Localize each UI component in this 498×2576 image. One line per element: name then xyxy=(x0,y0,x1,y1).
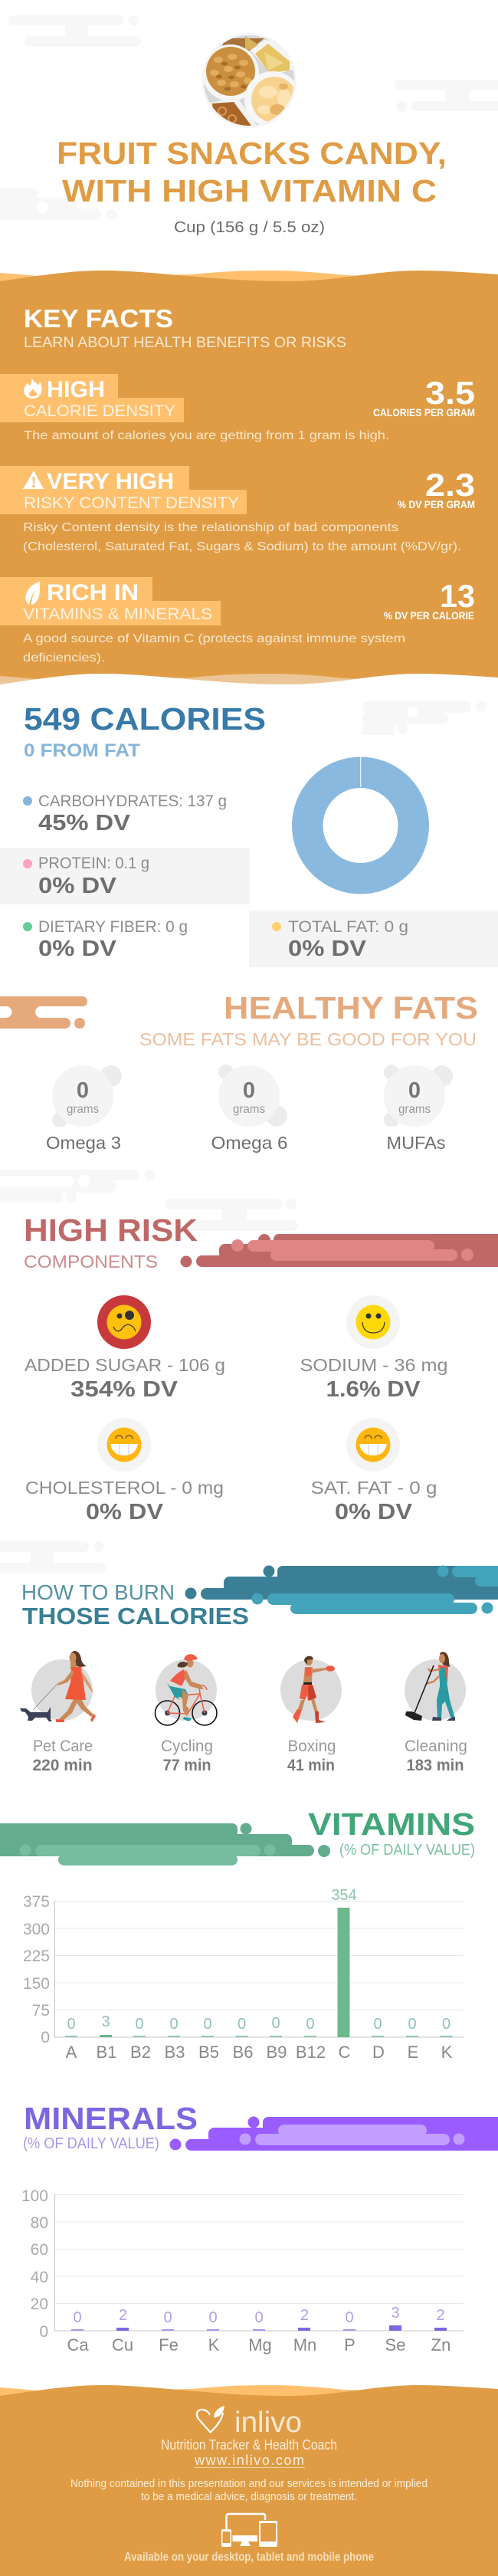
legend: protein: PROTEIN: 0.1 g xyxy=(38,855,149,872)
activity: cleaning: 183 min xyxy=(406,1757,464,1774)
panel: key facts xyxy=(0,271,498,686)
component: cholesterol xyxy=(25,1418,224,1524)
bar chart: vitamins: 75 xyxy=(32,2002,50,2020)
icon: grinning face xyxy=(107,1427,141,1462)
disclaimer: to be a medical advice, diagnosis or treatment. xyxy=(141,2490,357,2503)
stat: omega 3: Omega 3 xyxy=(46,1133,121,1153)
bar chart: vitamins: 0 xyxy=(67,2016,76,2033)
component: added sugar xyxy=(25,1295,225,1402)
subheading: (% OF DAILY VALUE) xyxy=(339,1842,475,1859)
bar chart: minerals: Ca xyxy=(67,2335,89,2354)
label: very high: VERY HIGH xyxy=(47,469,174,494)
bar chart: vitamins: K xyxy=(441,2043,453,2062)
bar chart: minerals: 2 xyxy=(119,2307,127,2324)
panel: footer xyxy=(0,2385,498,2576)
bar chart: minerals: P xyxy=(344,2335,355,2354)
bar chart: minerals: 0 xyxy=(73,2309,82,2326)
stat: omega 3: grams xyxy=(67,1103,99,1116)
stat: omega 6 xyxy=(211,1065,288,1153)
legend: carbohydrates: 45% DV xyxy=(38,811,131,835)
bar chart: minerals: 3 xyxy=(391,2305,400,2322)
bar chart: vitamins: B5 xyxy=(198,2043,219,2062)
component: added sugar: 354% DV xyxy=(70,1377,179,1402)
heading: VITAMINS xyxy=(308,1806,475,1842)
heading line one: HOW TO BURN xyxy=(21,1580,175,1604)
title: FRUIT SNACKS CANDY, xyxy=(57,136,447,171)
stat: omega 3: 0 xyxy=(77,1078,89,1103)
legend: total fat xyxy=(249,911,498,967)
description xyxy=(23,521,461,553)
bar chart: vitamins: E xyxy=(408,2043,418,2062)
bar chart: vitamins: A xyxy=(66,2043,77,2062)
bar chart: minerals: Fe xyxy=(159,2335,179,2354)
activity: cycling: Cycling xyxy=(161,1738,213,1755)
value: 13 xyxy=(440,578,475,614)
bar chart: minerals: Mn xyxy=(293,2335,316,2354)
header blob xyxy=(181,1234,498,1268)
fact: calorie density xyxy=(0,374,475,442)
availability note: Available on your desktop, tablet and mobile phone xyxy=(124,2551,374,2564)
title xyxy=(57,136,447,208)
bar chart: minerals: 2 xyxy=(436,2307,445,2324)
website link: www.inlivo.com xyxy=(194,2453,304,2468)
donut chart xyxy=(307,756,414,878)
component: added sugar: ADDED SUGAR - 106 g xyxy=(25,1355,225,1375)
tagline: Nutrition Tracker & Health Coach xyxy=(161,2437,337,2453)
disclaimer: Nothing contained in this presentation and our services is intended or implied xyxy=(70,2477,428,2490)
unit: % DV PER CALORIE xyxy=(384,609,474,622)
component: sodium: SODIUM - 36 mg xyxy=(300,1355,447,1375)
subheading: COMPONENTS xyxy=(24,1252,158,1272)
legend: carbohydrates: CARBOHYDRATES: 137 g xyxy=(38,792,227,810)
heading line two: THOSE CALORIES xyxy=(22,1603,249,1629)
bar chart: minerals: 80 xyxy=(31,2214,48,2232)
stat: mufas: 0 xyxy=(408,1078,421,1103)
activity: boxing: 41 min xyxy=(287,1757,335,1774)
stat: mufas xyxy=(384,1065,453,1153)
heading: HIGH RISK xyxy=(24,1213,198,1248)
bar chart: vitamins: 0 xyxy=(408,2016,417,2033)
icon: flame xyxy=(24,377,41,399)
description: Risky Content density is the relationship of bad components xyxy=(23,521,398,534)
legend: dietary fiber xyxy=(23,918,188,961)
unit: % DV PER GRAM xyxy=(398,498,475,510)
heading: 549 calories: 549 CALORIES xyxy=(24,701,266,737)
bar chart: minerals: 60 xyxy=(31,2241,48,2259)
component: sodium: 1.6% DV xyxy=(326,1377,421,1402)
value: 3.5 xyxy=(425,375,475,411)
activity: cycling: 77 min xyxy=(162,1757,211,1774)
bar chart: minerals: 0 xyxy=(39,2323,48,2341)
header blob xyxy=(185,1565,498,1614)
heading: MINERALS xyxy=(24,2101,198,2136)
heading: HEALTHY FATS xyxy=(224,990,478,1025)
icon: woman walking dog xyxy=(20,1651,96,1722)
bar chart: vitamins: B9 xyxy=(267,2043,287,2062)
activity: boxing xyxy=(280,1656,342,1774)
stat: omega 6: 0 xyxy=(243,1078,255,1103)
panel: calories xyxy=(0,701,498,967)
activity: cycling xyxy=(155,1654,217,1774)
component: saturated fat: SAT. FAT - 0 g xyxy=(311,1478,437,1498)
bar chart: minerals: 20 xyxy=(31,2295,48,2313)
icon: grinning face xyxy=(355,1427,391,1462)
bar chart: vitamins: 0 xyxy=(203,2016,212,2033)
activity: boxing: Boxing xyxy=(288,1738,336,1755)
label: risky content density: RISKY CONTENT DENSITY xyxy=(24,494,239,512)
label: rich in: RICH IN xyxy=(47,580,139,605)
stat: mufas: grams xyxy=(398,1103,431,1116)
unit: CALORIES PER GRAM xyxy=(373,406,475,418)
description: (Cholesterol, Saturated Fat, Sugars & Sodium) to the amount (%DV/gr). xyxy=(23,540,461,553)
brand name: inlivo xyxy=(234,2407,302,2439)
bar chart: vitamins: 0 xyxy=(442,2016,450,2033)
stat: omega 6: Omega 6 xyxy=(211,1133,288,1153)
bar chart: vitamins: 0 xyxy=(169,2016,179,2033)
description: The amount of calories you are getting from 1 gram is high. xyxy=(24,429,389,442)
bar chart: vitamins: 3 xyxy=(101,2013,110,2030)
icon: smiling face xyxy=(355,1304,391,1340)
component: saturated fat xyxy=(311,1418,437,1524)
bar chart: vitamins: 150 xyxy=(23,1975,50,1993)
activity: pet care xyxy=(20,1651,96,1774)
bar chart: minerals xyxy=(21,2187,464,2354)
component: saturated fat: 0% DV xyxy=(335,1500,413,1524)
bar chart: minerals: Mg xyxy=(248,2335,272,2354)
fact: rich in vitamins and minerals xyxy=(0,577,475,665)
bar chart: vitamins: 300 xyxy=(23,1921,50,1938)
legend: total fat: TOTAL FAT: 0 g xyxy=(288,918,408,936)
header blob xyxy=(0,1823,330,1866)
activity: pet care: Pet Care xyxy=(33,1738,93,1755)
activity: cleaning: Cleaning xyxy=(405,1738,467,1755)
stat: mufas: MUFAs xyxy=(386,1133,446,1153)
bar chart: vitamins: 0 xyxy=(41,2029,50,2046)
component: cholesterol: CHOLESTEROL - 0 mg xyxy=(25,1478,224,1498)
bar chart: minerals: Cu xyxy=(112,2335,133,2354)
legend: dietary fiber: 0% DV xyxy=(38,937,117,961)
bar chart: vitamins: B12 xyxy=(296,2043,326,2062)
fact: risky content density xyxy=(0,466,475,553)
bar chart: vitamins: B3 xyxy=(165,2043,185,2062)
subheading: LEARN ABOUT HEALTH BENEFITS OR RISKS xyxy=(24,335,346,351)
panel: high risk xyxy=(24,1213,498,1524)
value: 2.3 xyxy=(425,467,475,503)
bar chart: vitamins: 0 xyxy=(238,2016,246,2033)
bar chart: minerals: 2 xyxy=(300,2307,309,2324)
icon: woman cycling xyxy=(155,1654,217,1725)
activity: cleaning xyxy=(405,1652,467,1774)
title: WITH HIGH VITAMIN C xyxy=(62,173,437,208)
bar chart: minerals: 0 xyxy=(254,2309,264,2326)
stat: omega 6: grams xyxy=(233,1103,265,1116)
description: A good source of Vitamin C (protects against immune system xyxy=(23,632,405,645)
icon: warning triangle xyxy=(23,471,44,489)
bar chart: vitamins: B6 xyxy=(233,2043,253,2062)
bar chart: minerals: 40 xyxy=(31,2269,48,2286)
heading: key facts: KEY FACTS xyxy=(24,304,173,333)
panel: minerals xyxy=(21,2101,498,2354)
food photo xyxy=(201,33,301,130)
panel: vitamins xyxy=(0,1806,475,2062)
legend: carbohydrates xyxy=(23,792,227,835)
legend: protein xyxy=(0,848,250,904)
bar chart: vitamins: 354 xyxy=(331,1887,357,1904)
disclaimer xyxy=(70,2477,428,2503)
label: calorie density: CALORIE DENSITY xyxy=(24,402,175,420)
panel: how to burn calories xyxy=(20,1565,498,1774)
bar chart: vitamins: C xyxy=(339,2043,351,2062)
bar chart: vitamins: B2 xyxy=(130,2043,151,2062)
component: sodium xyxy=(300,1295,447,1402)
description: deficiencies). xyxy=(23,651,105,665)
serving size: Cup (156 g / 5.5 oz) xyxy=(174,219,325,236)
header blob xyxy=(170,2117,498,2151)
subheading: (% OF DAILY VALUE) xyxy=(23,2135,159,2152)
component: cholesterol: 0% DV xyxy=(86,1500,164,1524)
bar chart: vitamins: B1 xyxy=(97,2043,116,2062)
bar chart: vitamins: 0 xyxy=(373,2016,382,2033)
bar chart: vitamins: 0 xyxy=(135,2016,144,2033)
icon: devices xyxy=(221,2514,277,2547)
subheading: SOME FATS MAY BE GOOD FOR YOU xyxy=(139,1029,477,1049)
bar chart: vitamins xyxy=(23,1887,464,2062)
label: vitamins and minerals: VITAMINS & MINERALS xyxy=(23,605,212,623)
bar chart: minerals: 0 xyxy=(345,2309,354,2326)
icon: boxer xyxy=(293,1656,335,1723)
bar chart: minerals: 0 xyxy=(208,2309,218,2326)
bar chart: minerals: 0 xyxy=(163,2309,172,2326)
icon: woman sweeping xyxy=(405,1652,455,1721)
subheading: from fat: 0 FROM FAT xyxy=(24,740,140,761)
bar chart: vitamins: 0 xyxy=(306,2016,315,2033)
bar chart: minerals: Zn xyxy=(431,2335,450,2354)
bar chart: minerals: Se xyxy=(385,2335,405,2354)
icon: leaf xyxy=(25,582,40,605)
bar chart: vitamins: 225 xyxy=(23,1948,50,1965)
activity: pet care: 220 min xyxy=(32,1757,92,1774)
legend: total fat: 0% DV xyxy=(288,937,367,961)
bar chart: minerals: K xyxy=(208,2335,220,2354)
decorative clouds xyxy=(0,15,498,1573)
bar chart: vitamins: 375 xyxy=(23,1893,50,1911)
stat: omega 3 xyxy=(46,1065,122,1153)
icon: inlivo heart logo xyxy=(197,2406,224,2433)
header blob xyxy=(0,996,87,1029)
legend: dietary fiber: DIETARY FIBER: 0 g xyxy=(38,918,188,936)
bar chart: vitamins: 0 xyxy=(271,2015,280,2032)
panel: healthy fats xyxy=(0,990,478,1153)
bar chart: vitamins: D xyxy=(372,2043,385,2062)
bar chart: minerals: 100 xyxy=(21,2187,48,2205)
description xyxy=(23,632,405,665)
label: high: HIGH xyxy=(47,377,105,402)
icon: sad face xyxy=(107,1304,141,1340)
legend: protein: 0% DV xyxy=(38,874,117,898)
